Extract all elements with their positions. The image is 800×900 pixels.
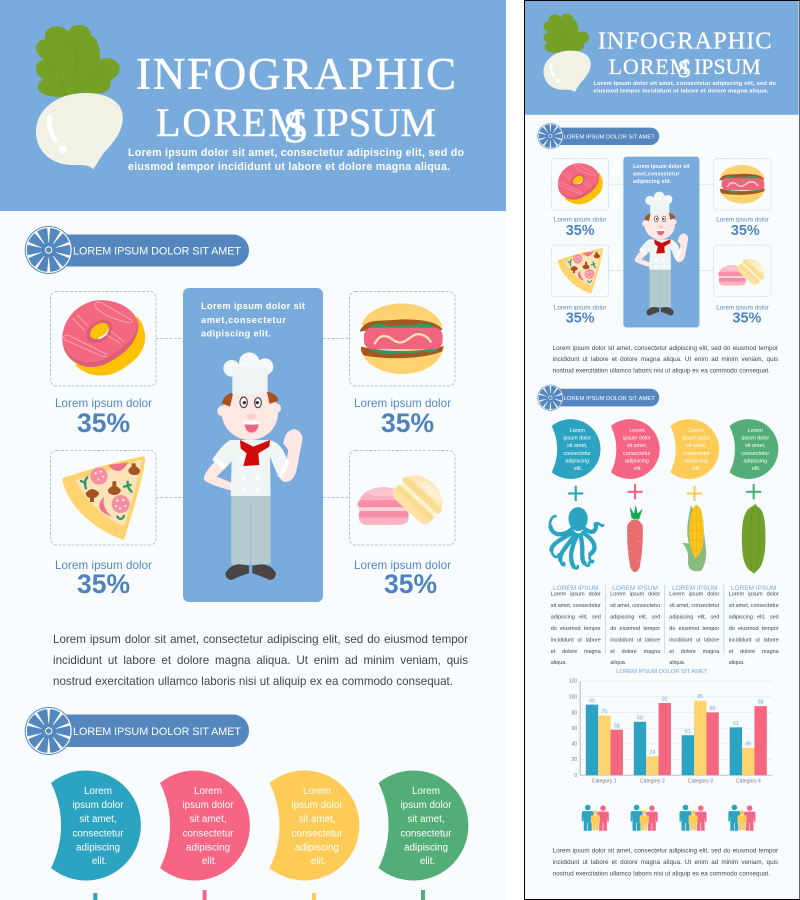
panel: chef: amet,consectetur (201, 315, 286, 325)
overview stat: pizza: 35% (566, 311, 595, 327)
section heading 2 (25, 707, 249, 755)
icon: turnip (36, 25, 123, 169)
overview card: yellow: ipsum dolor (682, 436, 710, 442)
overview stat: macarons (716, 305, 769, 327)
overview card: blue: consectetur (564, 451, 591, 457)
overview header description: Lorem ipsum dolor sit amet, consectetur adipiscing elit, sed do (594, 81, 777, 87)
stat: pizza: Lorem ipsum dolor (55, 559, 152, 572)
overview header description (594, 81, 777, 94)
card: green: consectetur (400, 828, 452, 840)
bars: category 4 (730, 700, 767, 785)
subtitle right word: IPSUM (313, 100, 436, 145)
panel: chef: adipiscing elit. (201, 328, 271, 338)
bars: category 2 (634, 697, 671, 785)
card: pink: sit amet, (189, 814, 227, 825)
overview plus: pink (628, 484, 643, 499)
column text 4 (728, 591, 779, 666)
y axis labels: 120 (569, 679, 578, 685)
overview icon: burger (720, 165, 765, 203)
column text 3: do eiusmod tempor (669, 625, 719, 631)
card: yellow: adipiscing (295, 842, 339, 854)
subtitle left word: LOREM (156, 100, 304, 145)
card: green (378, 770, 468, 880)
overview icon: donut (558, 163, 603, 204)
stat: pizza: 35% (77, 569, 130, 599)
stat: donut (55, 397, 152, 438)
overview stat: burger: Lorem ipsum dolor (716, 216, 769, 223)
icon: family 1 (582, 805, 609, 831)
bars: category 1: Category 1 (592, 779, 617, 785)
bars: category 1: 58 (614, 723, 620, 729)
icon: corn (682, 505, 706, 571)
overview paragraph 1: incididunt ut labore et dolore magna aliqua. Ut enim ad minim veniam, quis (553, 356, 778, 363)
card: blue: ipsum dolor (72, 800, 124, 811)
overview card: pink: elit. (634, 466, 642, 472)
card: yellow: sit amet, (298, 814, 336, 825)
overview subtitle left word: LOREM (609, 55, 689, 79)
overview card: yellow (671, 419, 719, 479)
overview stat: macarons: 35% (733, 311, 762, 327)
bars: category 4: 61 (733, 721, 739, 727)
card: yellow: elit. (311, 856, 326, 867)
overview plus: yellow (687, 486, 702, 501)
plus: yellow (300, 893, 328, 900)
icon: family 2 (631, 805, 658, 831)
bars: category 3: 80 (710, 706, 716, 712)
card: blue: sit amet, (79, 814, 117, 825)
overview paragraph 1 (553, 345, 778, 374)
column text 1: et dolore magna (551, 648, 601, 654)
overview card: green: ipsum dolor (742, 436, 770, 442)
icon: donut (62, 300, 145, 376)
header description (128, 147, 464, 173)
card: pink: adipiscing (186, 842, 230, 854)
overview section heading 1: LOREM IPSUM DOLOR SIT AMET (564, 134, 655, 140)
overview card: blue: ipsum dolor (564, 436, 591, 442)
bars: category 3: 95 (698, 694, 703, 700)
column text 2: adipiscing elit, sed (610, 614, 660, 620)
overview card: yellow: sit amet, (686, 443, 707, 449)
overview paragraph 1: nostrud exercitation ullamco laboris nisi ut aliquip ex ea commodo consequat. (553, 367, 770, 374)
overview icon: turnip (544, 14, 591, 92)
card: blue: elit. (92, 856, 107, 867)
overview icon: pizza (558, 248, 603, 294)
stat: macarons (354, 559, 451, 599)
section heading 1: LOREM IPSUM DOLOR SIT AMET (73, 246, 241, 258)
overview panel: chef (624, 157, 700, 327)
bars: category 1: 90 (589, 698, 595, 704)
icon: family 3 (680, 805, 707, 831)
bars: category 1: 76 (602, 709, 608, 715)
y axis labels: 60 (572, 726, 578, 732)
stat: pizza (55, 559, 152, 599)
overview card: blue (552, 419, 601, 479)
column heading 2: LOREM IPSUM (612, 585, 658, 592)
column text 1: incididunt ut labore (551, 637, 601, 643)
column heading 4: LOREM IPSUM (731, 585, 777, 592)
bars: category 2: Category 2 (640, 779, 665, 785)
stat: donut: 35% (77, 408, 130, 438)
stat: burger (354, 397, 451, 438)
card: pink: elit. (202, 856, 217, 867)
bars: category 3 (682, 694, 719, 785)
bars: category 2: 92 (662, 697, 668, 703)
bar chart (569, 679, 772, 785)
panel: chef (183, 288, 323, 602)
overview panel: chef: Lorem ipsum dolor sit (633, 164, 690, 170)
overview paragraph 2: Lorem ipsum dolor sit amet, consectetur adipiscing elit, sed do eiusmod tempor (553, 847, 778, 854)
stat: burger: Lorem ipsum dolor (354, 397, 451, 410)
card: green: ipsum dolor (400, 800, 452, 811)
column text 2: Lorem ipsum dolor (610, 591, 660, 597)
column text 2 (610, 591, 661, 666)
subtitle overlapping letter: S (283, 101, 309, 152)
y axis labels: 0 (575, 773, 578, 779)
stat: macarons: 35% (384, 569, 437, 599)
stat: burger: 35% (381, 408, 434, 438)
overview paragraph 2: incididunt ut labore et dolore magna aliqua. Ut enim ad minim veniam, quis (553, 859, 778, 866)
chart title: LOREM IPSUM DOLOR SIT AMET (616, 669, 708, 675)
card: yellow: ipsum dolor (291, 800, 343, 811)
overview panel: chef: adipiscing elit. (633, 179, 672, 185)
paragraph: nostrud exercitation ullamco laboris nisi ut aliquip ex ea commodo consequat. (53, 675, 453, 688)
card: green: sit amet, (407, 814, 445, 825)
column text 3: incididunt ut labore (669, 637, 719, 643)
overview section heading 2: LOREM IPSUM DOLOR SIT AMET (564, 396, 655, 402)
column text 2: do eiusmod tempor (610, 625, 660, 631)
overview card: pink: Lorem (630, 428, 645, 434)
overview plus: green (746, 484, 761, 499)
y axis labels: 80 (572, 710, 578, 716)
overview card: green: sit amet, (745, 443, 766, 449)
column heading 1: LOREM IPSUM (553, 585, 599, 592)
column text 3: aliqua. (669, 660, 685, 666)
header description: Lorem ipsum dolor sit amet, consectetur adipiscing elit, sed do (128, 147, 464, 159)
y axis labels: 100 (569, 694, 578, 700)
overview stat: donut: 35% (566, 223, 595, 239)
card: pink: Lorem (194, 786, 222, 797)
overview card: yellow: elit. (693, 466, 701, 472)
column text 4: incididunt ut labore (729, 637, 779, 643)
column text 4: sit amet, consectetur (729, 602, 779, 608)
column text 2: et dolore magna (610, 648, 660, 654)
header band (0, 0, 506, 211)
title: INFOGRAPHIC (136, 49, 456, 99)
icon: burger (360, 303, 444, 374)
bars: category 2: 24 (650, 750, 656, 756)
overview stat: donut (554, 216, 607, 239)
card: blue: Lorem (84, 786, 112, 797)
bars: category 4: 35 (746, 741, 751, 747)
icon: macarons (358, 466, 451, 528)
overview card: green: elit. (752, 466, 761, 472)
overview section heading 2 (538, 385, 659, 411)
panel: full infographic overview (524, 0, 799, 900)
overview card: pink (611, 419, 660, 479)
column text 2: sit amet, consectetur (610, 602, 661, 608)
column heading 3: LOREM IPSUM (672, 585, 718, 592)
overview stat: pizza: Lorem ipsum dolor (554, 305, 607, 312)
header description: eiusmod tempor incididunt ut labore et dolore magna aliqua. (128, 161, 450, 173)
overview card: green: adipiscing (744, 459, 767, 465)
column text 3: Lorem ipsum dolor (669, 591, 719, 597)
column text 4: do eiusmod tempor (729, 625, 779, 631)
overview plus: blue (568, 486, 584, 501)
stat: macarons: Lorem ipsum dolor (354, 559, 451, 572)
plus: green (409, 890, 437, 900)
panel: enlarged infographic view (0, 0, 506, 900)
icon: family 4 (729, 805, 756, 831)
y axis labels: 40 (572, 742, 578, 748)
column text 1 (550, 591, 601, 666)
overview icon: macarons (718, 254, 769, 287)
card: blue (51, 770, 141, 880)
paragraph (53, 633, 468, 688)
icon: cucumber (742, 504, 766, 573)
bars: category 3: 51 (685, 729, 691, 735)
card: pink: consectetur (182, 828, 234, 840)
overview card: pink: sit amet, (627, 443, 648, 449)
y axis labels: 20 (572, 757, 578, 763)
overview card: blue: Lorem (570, 428, 586, 434)
column text 1: do eiusmod tempor (551, 625, 601, 631)
overview card: yellow: adipiscing (684, 459, 708, 465)
overview paragraph 1: Lorem ipsum dolor sit amet, consectetur adipiscing elit, sed do eiusmod tempor (553, 345, 778, 352)
column text 3 (669, 591, 720, 666)
overview card: pink: adipiscing (625, 459, 649, 465)
overview title: INFOGRAPHIC (598, 27, 772, 54)
column text 2: incididunt ut labore (610, 637, 660, 643)
bars: category 2: 68 (637, 715, 643, 721)
overview card: blue: adipiscing (565, 459, 589, 465)
overview panel: chef: amet,consectetur (633, 172, 680, 178)
card: yellow: consectetur (291, 828, 343, 840)
overview card: blue: elit. (574, 466, 582, 472)
paragraph: Lorem ipsum dolor sit amet, consectetur adipiscing elit, sed do eiusmod tempor (53, 633, 468, 646)
overview stat: pizza (554, 305, 607, 327)
column text 4: aliqua. (729, 660, 745, 666)
paragraph: incididunt ut labore et dolore magna aliqua. Ut enim ad minim veniam, quis (53, 654, 468, 667)
section heading 1 (25, 226, 249, 274)
card: pink: ipsum dolor (182, 800, 234, 811)
column text 3: sit amet, consectetur (669, 602, 720, 608)
column text 3: et dolore magna (669, 648, 719, 654)
card: green: adipiscing (404, 842, 448, 854)
column text 2: aliqua. (610, 660, 626, 666)
overview card: green: Lorem (748, 428, 764, 434)
plus: blue (81, 893, 109, 900)
icon: pizza (62, 456, 145, 540)
icon: carrot (627, 505, 643, 572)
overview header description: eiusmod tempor incididunt ut labore et dolore magna aliqua. (594, 88, 769, 94)
overview card: yellow: consectetur (682, 451, 710, 457)
overview stat: macarons: Lorem ipsum dolor (716, 305, 769, 312)
overview card: green (730, 419, 779, 479)
overview stat: burger: 35% (731, 223, 760, 239)
column text 4: adipiscing elit, sed (729, 614, 779, 620)
overview subtitle overlapping letter: S (678, 56, 692, 83)
column text 4: Lorem ipsum dolor (729, 591, 779, 597)
panel: chef: Lorem ipsum dolor sit (201, 301, 305, 311)
card: yellow: Lorem (303, 786, 331, 797)
overview stat: burger (716, 216, 769, 239)
column text 1: sit amet, consectetur (551, 602, 601, 608)
bars: category 1 (586, 698, 623, 785)
bars: category 3: Category 3 (688, 779, 713, 785)
overview paragraph 2 (553, 847, 778, 877)
column text 1: aliqua. (551, 660, 567, 666)
overview paragraph 2: nostrud exercitation ullamco laboris nisi ut aliquip ex ea commodo consequat. (553, 870, 770, 877)
column text 4: et dolore magna (729, 648, 779, 654)
overview header band (524, 0, 799, 115)
column text 3: adipiscing elit, sed (669, 614, 719, 620)
overview card: pink: consectetur (623, 451, 651, 457)
card: yellow (270, 770, 359, 880)
overview subtitle right word: IPSUM (694, 55, 761, 79)
overview stat: donut: Lorem ipsum dolor (554, 216, 607, 223)
overview card: pink: ipsum dolor (623, 436, 651, 442)
stat: donut: Lorem ipsum dolor (55, 397, 152, 410)
section heading 2: LOREM IPSUM DOLOR SIT AMET (73, 726, 241, 738)
column text 1: adipiscing elit, sed (551, 614, 601, 620)
overview card: yellow: Lorem (689, 428, 704, 434)
y axis labels (569, 679, 578, 779)
overview card: green: consectetur (742, 451, 770, 457)
bars: category 4: Category 4 (736, 779, 761, 785)
icon: octopus (550, 507, 603, 568)
card: green: elit. (420, 856, 435, 867)
bars: category 4: 88 (758, 700, 764, 706)
overview section heading 1 (538, 123, 659, 149)
card: pink (160, 770, 250, 880)
column text 1: Lorem ipsum dolor (551, 591, 601, 597)
card: blue: consectetur (72, 828, 124, 840)
card: green: Lorem (412, 786, 440, 797)
plus: pink (191, 890, 219, 900)
card: blue: adipiscing (76, 842, 120, 854)
overview card: blue: sit amet, (567, 443, 588, 449)
